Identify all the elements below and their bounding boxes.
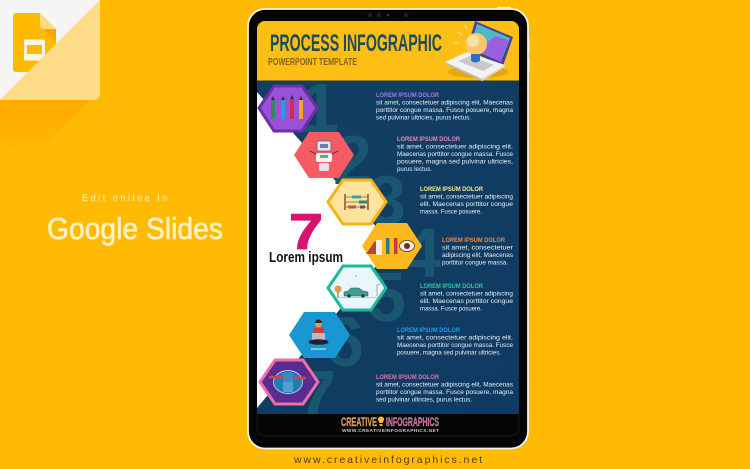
screen panel (257, 69, 519, 434)
step 1 text: sed pulvinar ultricies, purus lectus. (376, 114, 471, 122)
step 5 text: elit. Maecenas porttitor congue (420, 298, 513, 305)
step 7 text: porttitor congue massa. Fusce posuere, magna (376, 389, 513, 396)
icon: robot (310, 141, 338, 171)
icon: art supplies (366, 238, 414, 255)
step 2 text (397, 136, 513, 173)
step 6 hexagon: person with laptop (289, 312, 350, 358)
step 2 text: sit amet, consectetuer adipiscing elit. (397, 144, 513, 150)
step 1 text: sit amet, consectetuer adipiscing elit. Maecenas (376, 100, 514, 106)
icon: person at laptop (308, 320, 328, 350)
step 5 text (420, 283, 513, 312)
big background numerals: 3 (367, 161, 406, 239)
google slides corner badge (0, 0, 100, 160)
step 1 text: porttitor congue massa. Fusce posuere, magna (376, 107, 513, 114)
step 5 hexagon: car (328, 266, 386, 310)
step 7 text: sit amet, consectetuer adipiscing elit. Maecenas (376, 382, 514, 388)
step 5 text: sit amet, consectetuer adipiscing (420, 290, 513, 298)
step 3 text: sit amet, consectetuer adipiscing (420, 194, 513, 200)
icon: fist and pencil (269, 370, 306, 394)
step 7 text: LOREM IPSUM DOLOR (376, 374, 440, 381)
step 1 text: LOREM IPSUM DOLOR (376, 92, 440, 99)
title: PROCESS INFOGRAPHIC (270, 30, 442, 57)
step 2 text: posuere, magna sed pulvinar ultricies, (397, 158, 513, 166)
step 6 text: LOREM IPSUM DOLOR (397, 327, 461, 334)
edit online caption: Edit online in (82, 193, 167, 203)
step 4 text: LOREM IPSUM DOLOR (442, 237, 506, 244)
step 5 text: massa. Fusce posuere. (420, 306, 482, 312)
website url: www.creativeinfographics.net (293, 454, 482, 466)
step 5 text: LOREM IPSUM DOLOR (420, 283, 484, 290)
step 4 hexagon: art supplies (362, 223, 422, 269)
step 2 hexagon: robot (294, 132, 354, 178)
lorem ipsum caption: Lorem ipsum (269, 249, 343, 266)
step 4 text: sit amet, consectetuer (442, 244, 514, 252)
big background numerals: 5 (367, 258, 406, 336)
step 7 text: sed pulvinar ultricies, purus lectus. (376, 396, 472, 404)
step 6 text: sit amet, consectetuer adipiscing elit. (397, 334, 513, 342)
step 3 text: LOREM IPSUM DOLOR (420, 186, 484, 193)
subtitle: POWERPOINT TEMPLATE (268, 56, 357, 68)
step 3 text (420, 186, 513, 216)
step 2 text: purus lectus. (397, 166, 432, 173)
footer logo: CREATIVE (341, 415, 377, 429)
big background numerals (304, 84, 440, 414)
tablet camera (368, 12, 408, 18)
step 1 text (376, 92, 514, 122)
step 7 text (376, 374, 514, 404)
big background numerals: 2 (333, 121, 372, 199)
big background numerals: 6 (325, 303, 364, 381)
big background numerals: 1 (300, 69, 339, 147)
icon: abacus (344, 194, 369, 210)
icon: car scene (333, 275, 380, 298)
icon: laptop with light bulb (445, 21, 513, 81)
footer logo (341, 415, 439, 434)
big number seven: 7 (289, 204, 323, 260)
step 6 text: posuere, magna sed pulvinar ultricies. (397, 350, 501, 356)
step 6 text: Maecenas porttitor congue massa. Fusce (397, 342, 513, 349)
step 4 text: porttitor congue massa. (442, 260, 508, 266)
google slides wordmark: Google Slides (47, 211, 223, 246)
step 2 text: LOREM IPSUM DOLOR (397, 136, 461, 143)
step 7 hexagon: hand holding pencil (260, 360, 318, 404)
white diagonal wedge (257, 92, 393, 408)
header band (257, 21, 519, 82)
step 3 text: massa. Fusce posuere. (420, 208, 482, 216)
footer logo: WWW.CREATIVEINFOGRAPHICS.NET (342, 428, 439, 434)
icon: slides document (13, 13, 56, 72)
tablet side buttons (497, 7, 530, 72)
icon: pens (271, 95, 303, 119)
footer logo: INFOGRAPHICS (386, 415, 439, 429)
big background numerals: 7 (297, 356, 336, 434)
step 3 hexagon: abacus (328, 180, 386, 224)
step 3 text: elit. Maecenas porttitor congue (420, 201, 513, 208)
step 2 text: Maecenas porttitor congue massa. Fusce (397, 151, 513, 158)
seven lorem ipsum label (269, 204, 343, 266)
step 4 text (442, 237, 514, 266)
tablet (248, 7, 530, 448)
big background numerals: 4 (402, 214, 441, 292)
step 4 text: adipiscing elit. Maecenas (442, 252, 514, 259)
step 1 hexagon: pencils (259, 86, 317, 131)
step 6 text (397, 327, 513, 356)
